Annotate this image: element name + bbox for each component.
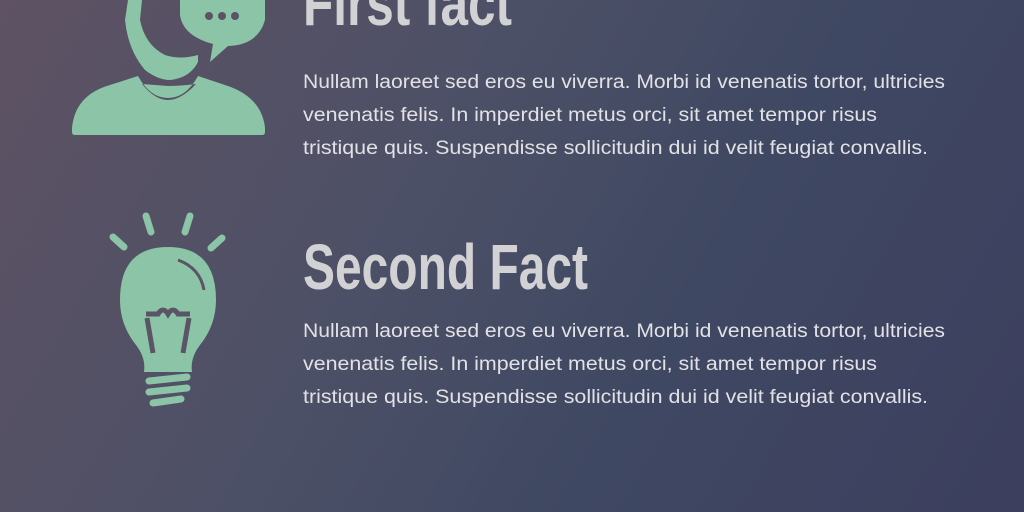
text block: first fact body: tristique quis. Suspendisse sollicitudin dui id velit feugiat convallis.: [303, 138, 928, 159]
text block: first fact body: [303, 72, 945, 159]
text block: second fact body: tristique quis. Suspendisse sollicitudin dui id velit feugiat convallis.: [303, 387, 928, 408]
text block: first fact body: Nullam laoreet sed eros eu viverra. Morbi id venenatis tortor, ultricies: [303, 72, 945, 93]
icon: person with speech bubble: [72, 0, 265, 135]
text block: first fact body: venenatis felis. In imperdiet metus orci, sit amet tempor risus: [303, 105, 877, 126]
icon: light bulb: [113, 216, 222, 403]
text block: second fact body: Nullam laoreet sed eros eu viverra. Morbi id venenatis tortor, ultricies: [303, 321, 945, 342]
text block: second fact body: venenatis felis. In imperdiet metus orci, sit amet tempor risus: [303, 354, 877, 375]
title: Second Fact: Second Fact: [303, 231, 588, 303]
text block: second fact body: [303, 321, 945, 408]
